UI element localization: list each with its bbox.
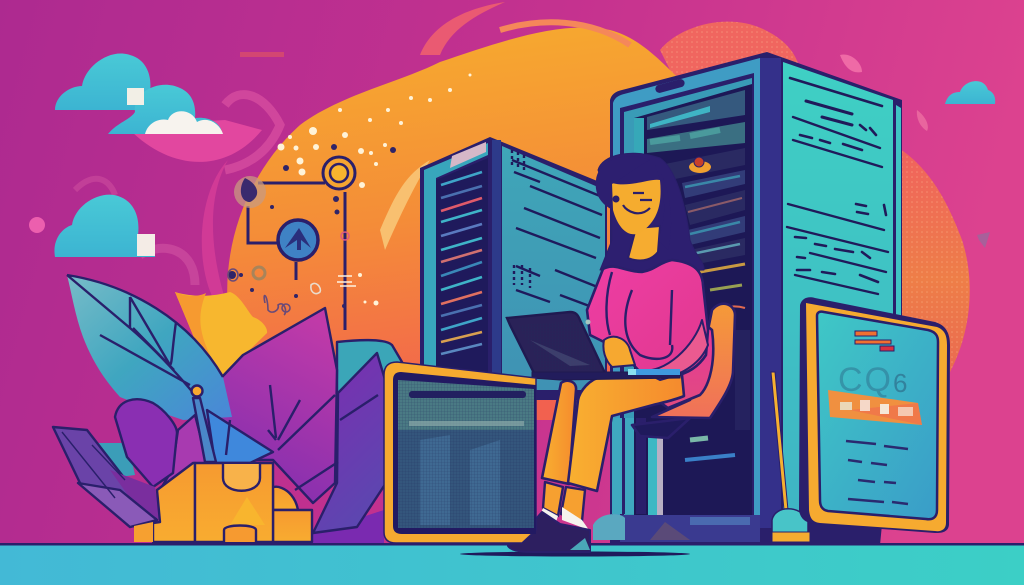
pole and base on server bbox=[771, 372, 810, 542]
tablet orange banner bbox=[828, 390, 922, 425]
leaf: blue wedge bbox=[207, 410, 273, 463]
near leg bbox=[568, 375, 684, 491]
small server side text lines bbox=[512, 150, 602, 310]
leaf: yellow bbox=[175, 292, 267, 377]
tablet glyphs: CQ bbox=[838, 361, 893, 399]
laptop bbox=[507, 312, 680, 380]
node: grey dark bbox=[234, 176, 266, 208]
side panel text lines bbox=[787, 78, 888, 294]
pen in box bbox=[192, 386, 216, 462]
cloud: lower left bbox=[29, 195, 155, 257]
hair back bbox=[598, 153, 704, 272]
leaf: dark purple back bbox=[313, 353, 386, 533]
tablet screen bbox=[817, 312, 938, 519]
far leg bbox=[542, 381, 576, 484]
hair front bbox=[596, 156, 650, 210]
leaf: teal lower left bbox=[92, 443, 135, 478]
tablet header icon bbox=[855, 331, 894, 351]
tablet glyph six: 6 bbox=[893, 368, 907, 398]
leaf: dark purple base bbox=[312, 510, 384, 543]
large server tower bbox=[593, 52, 902, 545]
rack dark interior bbox=[634, 84, 752, 530]
plant bbox=[53, 275, 402, 543]
small server rack rows bbox=[441, 172, 482, 354]
sweater body bbox=[587, 260, 708, 377]
small server tower bbox=[420, 137, 607, 400]
cloud: top right bbox=[945, 81, 995, 104]
chair bbox=[632, 304, 735, 438]
leaf: teal behind bbox=[337, 340, 402, 395]
network diagram bbox=[234, 157, 355, 330]
front panel frame bbox=[613, 58, 760, 540]
small server front strip bbox=[424, 143, 488, 380]
leaf: pale purple middle bbox=[160, 415, 207, 490]
tablet text lines bbox=[846, 441, 908, 504]
near calf bbox=[561, 487, 585, 521]
shoes bbox=[508, 512, 590, 552]
neck bbox=[628, 226, 660, 260]
decorative blobs upper right bbox=[240, 52, 990, 248]
facial features bbox=[623, 193, 652, 213]
scattered particles bbox=[228, 74, 472, 315]
node: blue bbox=[278, 220, 318, 260]
legs far calf bbox=[543, 482, 563, 516]
leaf: orange wedge bbox=[175, 292, 222, 377]
leaf: centre purple bbox=[190, 308, 337, 503]
leaf: feathered left bbox=[53, 427, 160, 527]
right tablet bbox=[799, 297, 950, 533]
rubble at server foot bbox=[593, 514, 760, 542]
woman bbox=[508, 153, 713, 552]
chair back and seat bbox=[652, 304, 735, 418]
face bbox=[612, 180, 661, 234]
cloud: middle with white underside bbox=[108, 85, 223, 134]
boxes bbox=[134, 463, 312, 542]
columns below seat bbox=[612, 418, 663, 517]
small server side panel bbox=[502, 146, 605, 390]
monitor screen bbox=[398, 380, 534, 528]
hip on chair bbox=[650, 320, 713, 408]
floor bbox=[0, 543, 1024, 585]
hand bbox=[603, 337, 635, 367]
orange blob backdrop bbox=[227, 2, 970, 420]
arm bbox=[640, 320, 708, 380]
socks bbox=[541, 508, 558, 522]
sweater folds bbox=[606, 272, 672, 359]
cloud: top left bbox=[55, 53, 150, 110]
left monitor bbox=[384, 362, 536, 543]
shoe detail bbox=[570, 538, 590, 550]
navy column bbox=[760, 58, 781, 528]
emblem on rack bbox=[689, 157, 711, 173]
node: orange ring bbox=[323, 157, 355, 189]
leaf veins and purple strokes bbox=[226, 385, 378, 490]
leaf: large blue bbox=[67, 275, 232, 420]
leaf: small purple bbox=[115, 399, 177, 487]
pink swirl behind clouds bbox=[75, 95, 280, 320]
slot on front bbox=[654, 78, 686, 94]
server side panel bbox=[783, 62, 893, 520]
rack shelves bbox=[647, 90, 750, 460]
